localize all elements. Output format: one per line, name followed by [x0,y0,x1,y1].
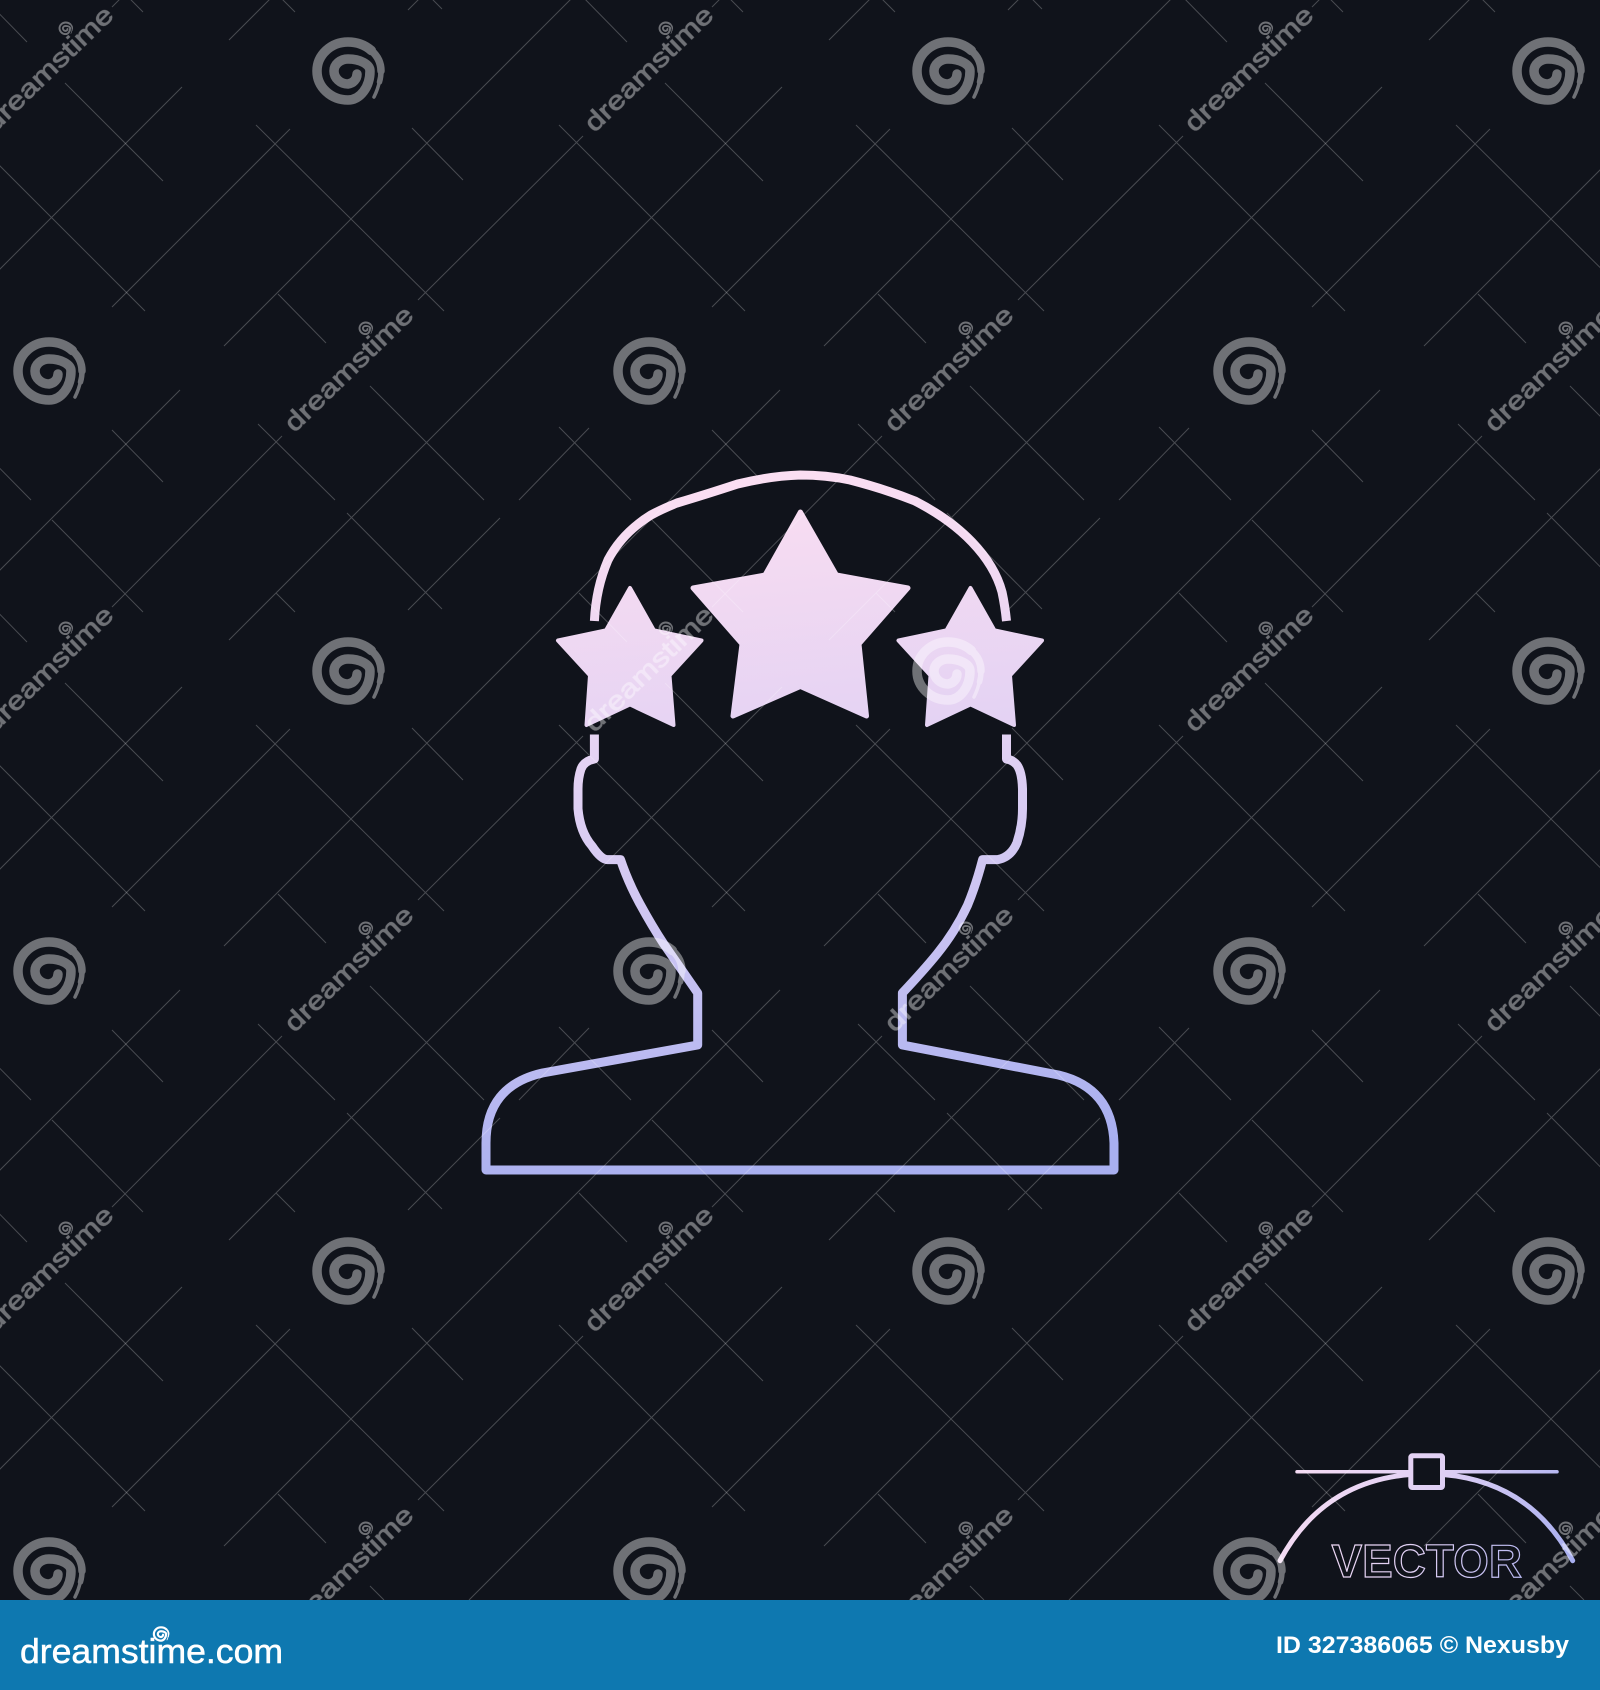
right star [898,588,1042,725]
icon: bezier handle and curve [1280,1456,1573,1561]
hair outline [594,475,1006,621]
icon: brand spiral mark [154,1627,169,1641]
brand wordmark: dreamstime.com [20,1633,283,1671]
left star [558,588,702,725]
bottom banner [0,1600,1600,1690]
center star [693,512,908,716]
vector label: VECTOR [1332,1535,1522,1587]
watermark wordmarks: dreamstime [578,599,719,738]
watermark wordmarks: dreamstime [1178,0,1319,138]
watermark wordmarks: dreamstime [878,899,1019,1038]
watermark wordmarks: dreamstime [1478,899,1600,1038]
person shoulders and lower head outline [486,734,1114,1170]
watermark wordmarks: dreamstime [278,899,419,1038]
watermark wordmarks: dreamstime [878,1499,1019,1638]
watermark wordmarks: dreamstime [1478,299,1600,438]
watermark wordmarks: dreamstime [1478,1499,1600,1638]
watermark wordmarks: dreamstime [1178,1199,1319,1338]
watermark wordmarks: dreamstime [578,1199,719,1338]
image id and author: ID 327386065 © Nexusby [1276,1632,1570,1659]
watermark wordmarks: dreamstime [878,299,1019,438]
vector badge [1280,1456,1573,1587]
watermark wordmarks: dreamstime [278,1499,419,1638]
watermark wordmarks: dreamstime [578,0,719,138]
watermark wordmarks: dreamstime [1178,599,1319,738]
watermark wordmarks: dreamstime [278,299,419,438]
icon: person with three stars [486,475,1114,1170]
